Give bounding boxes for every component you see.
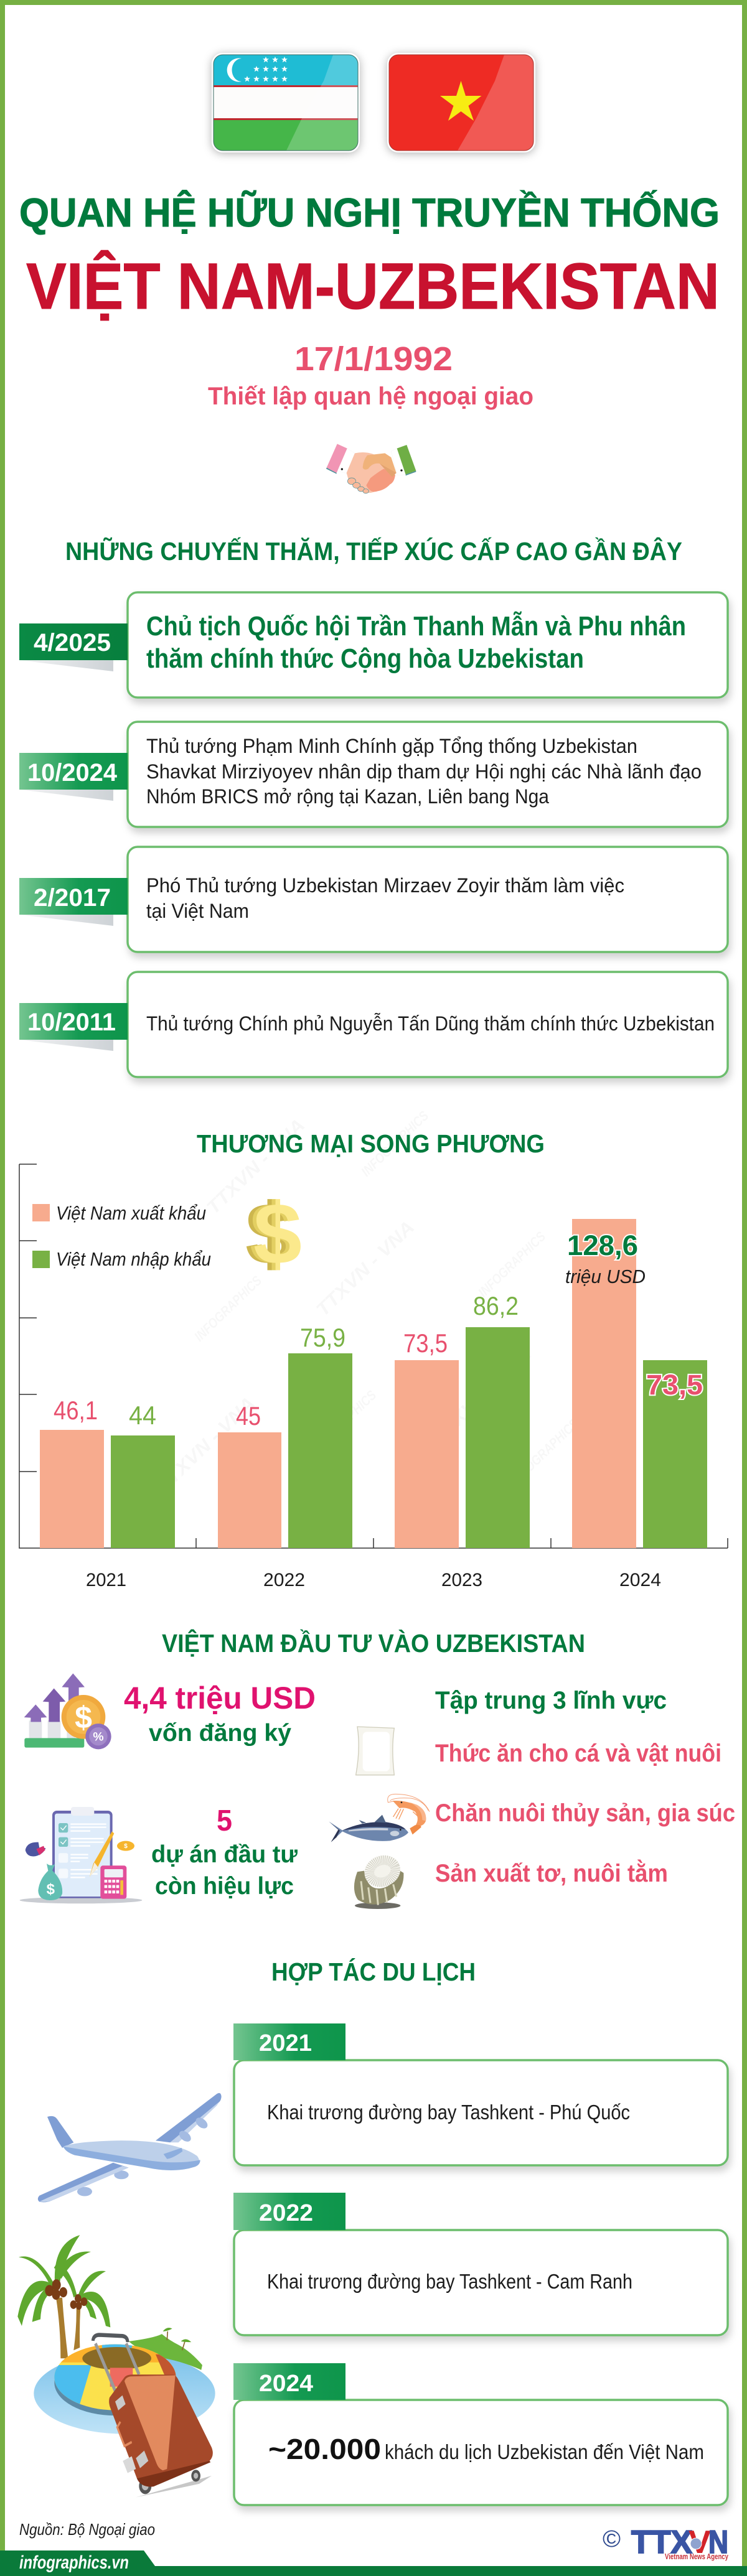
stat label: dự án đầu tư	[151, 1841, 298, 1868]
icon: clipboard and calculator	[20, 1807, 142, 1903]
distant island	[129, 2334, 202, 2370]
card text	[268, 2433, 704, 2465]
visit text: thăm chính thức Cộng hòa Uzbekistan	[146, 643, 584, 674]
icon: dollar sign: $	[245, 1185, 294, 1282]
panel: tourism 2021	[233, 2023, 728, 2165]
watermarks: TTXVN - VNA	[153, 1393, 259, 1496]
icon: silkworm cocoon	[354, 1850, 405, 1909]
2022 bars: 2022	[263, 1570, 305, 1590]
icon: airplane	[38, 2093, 222, 2202]
panel: tourism 2024: 2024	[259, 2371, 313, 2397]
visit text: Nhóm BRICS mở rộng tại Kazan, Liên bang Nga	[146, 785, 549, 808]
icon: dollar sign: $	[250, 1185, 298, 1282]
panel: tourism 2022: 2022	[259, 2200, 313, 2226]
panel: visit 2/2017	[19, 847, 728, 952]
icon: Vietnam flag	[387, 53, 535, 152]
icon: shrimp	[388, 1794, 430, 1834]
icon: growth arrows and coin	[24, 1673, 111, 1749]
2021 bars: 44	[129, 1401, 156, 1430]
2023 bars: 2023	[441, 1570, 482, 1590]
panel: visit 4/2025	[19, 592, 728, 698]
panel: visit 10/2024	[19, 722, 728, 827]
legend	[32, 1202, 211, 1270]
stat: active projects: 5	[217, 1804, 232, 1837]
panel: three fields: Tập trung 3 lĩnh vực	[435, 1687, 667, 1714]
subtitle: Thiết lập quan hệ ngoại giao	[208, 383, 533, 410]
footer band	[0, 2550, 747, 2576]
watermarks: TTXVN - VNA	[203, 1115, 309, 1218]
logo: TTXVN	[603, 2524, 729, 2561]
card text: ~20.000	[268, 2433, 381, 2465]
visit text: Thủ tướng Chính phủ Nguyễn Tấn Dũng thăm chính thức Uzbekistan	[146, 1012, 715, 1035]
2022 bars: 75,9	[300, 1323, 345, 1352]
stat: active projects	[151, 1804, 298, 1900]
panel: visit 10/2011: 10/2011	[27, 1009, 116, 1036]
2022 bars: 45	[236, 1401, 261, 1430]
heading: tourism cooperation: HỢP TÁC DU LỊCH	[271, 1958, 476, 1986]
coconuts	[45, 2279, 87, 2310]
card text: Khai trương đường bay Tashkent - Phú Quốc	[267, 2101, 630, 2124]
date and subtitle	[208, 340, 533, 410]
visit text: Phó Thủ tướng Uzbekistan Mirzaev Zoyir thăm làm việc	[146, 874, 624, 897]
panel: visit 10/2011	[19, 972, 728, 1077]
icon: feed bag	[356, 1727, 394, 1775]
2024 bars: 73,5	[646, 1369, 703, 1401]
2021 bars	[40, 1396, 175, 1590]
2023 bars	[395, 1291, 530, 1590]
2023 bars: 86,2	[473, 1291, 519, 1320]
watermarks: INFOGRAPHICS	[508, 1416, 581, 1488]
watermarks	[153, 1108, 581, 1496]
site name: infographics.vn	[19, 2552, 129, 2573]
heading: bilateral trade: THƯƠNG MẠI SONG PHƯƠNG	[197, 1129, 545, 1158]
title: QUAN HỆ HỮU NGHỊ TRUYỀN THỐNG	[19, 190, 720, 235]
watermarks: TTXVN - VNA	[430, 1344, 535, 1447]
stat: registered capital	[124, 1681, 316, 1747]
2024 bars	[565, 1219, 707, 1590]
panel: visit 10/2024: 10/2024	[27, 759, 118, 786]
logo: TTXVN: V	[688, 2524, 711, 2560]
source note: Nguồn: Bộ Ngoại giao	[19, 2520, 155, 2539]
watermarks: INFOGRAPHICS	[191, 1272, 265, 1345]
date and subtitle: 17/1/1992	[294, 340, 453, 378]
watermarks: INFOGRAPHICS	[358, 1108, 431, 1180]
card text: khách du lịch Uzbekistan đến Việt Nam	[385, 2440, 704, 2463]
stat label: vốn đăng ký	[149, 1720, 291, 1747]
bar chart: bilateral trade	[19, 1164, 728, 1590]
water	[34, 2353, 215, 2434]
icon: palm trees, swim ring and suitcase	[17, 2235, 215, 2498]
heading: high-level visits: NHỮNG CHUYẾN THĂM, TIẾP XÚC CẤP CAO GẦN ĐÂY	[65, 537, 682, 566]
panel: visit 4/2025: 4/2025	[34, 629, 111, 656]
2023 bars: 73,5	[403, 1328, 448, 1358]
panel: tourism 2022	[233, 2193, 728, 2335]
icon: Uzbekistan flag	[212, 53, 360, 152]
swim ring	[54, 2343, 179, 2415]
logo: TTXVN: N	[708, 2524, 728, 2560]
panel: visit 2/2017: 2/2017	[34, 884, 111, 912]
2024 bars: 128,6	[567, 1230, 638, 1261]
watermarks: TTXVN - VNA	[312, 1217, 418, 1320]
palm trunks	[56, 2298, 80, 2358]
icon: growth arrows and coin: $	[75, 1700, 92, 1735]
panel: tourism 2021: 2021	[259, 2030, 312, 2056]
suitcase latches	[115, 2396, 126, 2410]
panel: three fields	[435, 1687, 735, 1887]
suitcase body	[109, 2374, 213, 2486]
visit text: Thủ tướng Phạm Minh Chính gặp Tổng thống Uzbekistan	[146, 735, 637, 757]
watermarks: INFOGRAPHICS	[475, 1228, 548, 1300]
legend: Việt Nam xuất khẩu	[56, 1202, 206, 1224]
2021 bars: 46,1	[54, 1396, 98, 1425]
panel: tourism 2024	[233, 2363, 728, 2505]
visit text: tại Việt Nam	[146, 900, 249, 922]
palm fronds	[17, 2235, 110, 2327]
stat: registered capital: 4,4 triệu USD	[124, 1681, 316, 1715]
2024 bars: triệu USD	[565, 1266, 646, 1287]
icon: clipboard and calculator: $	[47, 1881, 55, 1898]
suitcase handles	[95, 2343, 139, 2391]
title	[19, 190, 720, 323]
icon: clipboard and calculator: $	[124, 1843, 128, 1850]
legend: Việt Nam nhập khẩu	[56, 1248, 211, 1270]
logo: TTXVN: ©	[603, 2526, 621, 2552]
suitcase wheels	[139, 2478, 151, 2494]
2022 bars	[218, 1323, 352, 1590]
icon: growth arrows and coin: %	[93, 1730, 104, 1743]
logo: TTXVN: TTX	[631, 2524, 692, 2560]
watermarks: INFOGRAPHICS	[306, 1387, 379, 1459]
field: silk: Sản xuất tơ, nuôi tằm	[435, 1859, 668, 1887]
icon: tuna fish	[329, 1815, 408, 1842]
card text: Khai trương đường bay Tashkent - Cam Ranh	[267, 2270, 632, 2293]
icon: dollar sign: $	[253, 1185, 302, 1282]
stat label: còn hiệu lực	[155, 1873, 294, 1900]
icon: handshake	[326, 444, 416, 493]
field: feed: Thức ăn cho cá và vật nuôi	[435, 1740, 721, 1767]
heading: Vietnam investment: VIỆT NAM ĐẦU TƯ VÀO UZBEKISTAN	[162, 1629, 585, 1658]
2024 bars: 2024	[619, 1570, 661, 1590]
2021 bars: 2021	[86, 1570, 126, 1590]
visit text: Shavkat Mirziyoyev nhân dịp tham dự Hội nghị các Nhà lãnh đạo	[146, 760, 702, 783]
suitcase shadow	[136, 2476, 212, 2498]
